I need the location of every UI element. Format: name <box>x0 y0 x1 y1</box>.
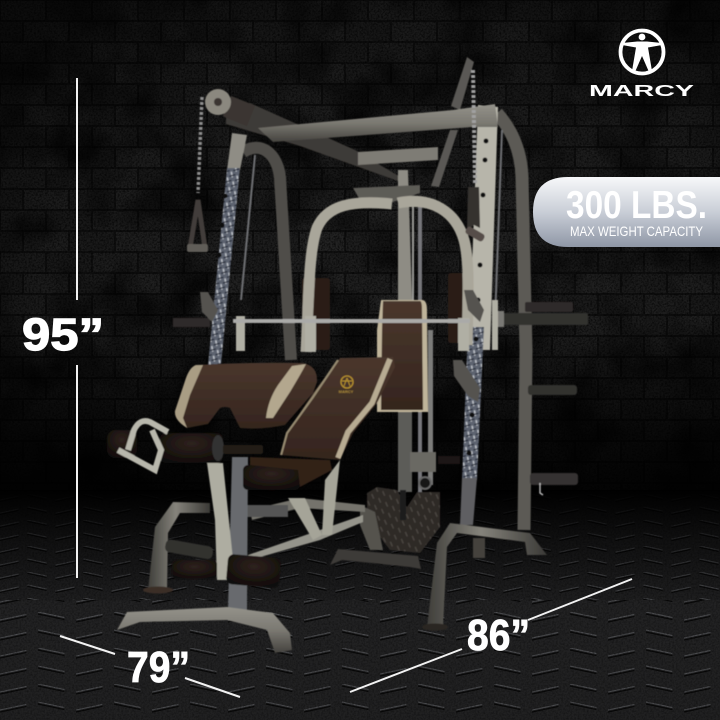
background: brick wall <box>0 0 720 530</box>
right chain and handle <box>464 70 486 242</box>
middle box bar <box>358 147 438 165</box>
left arch <box>243 148 291 360</box>
right floor leg <box>427 523 547 627</box>
foot plate <box>367 487 440 553</box>
bench rear arch <box>148 502 210 590</box>
weight capacity badge <box>533 177 720 247</box>
left upright <box>208 133 247 365</box>
top cross beam <box>258 104 498 142</box>
rear foot bar <box>330 549 421 569</box>
width dimension <box>350 579 632 692</box>
smith machine home gym <box>107 57 588 653</box>
background: herringbone floor <box>0 490 720 720</box>
center column <box>398 170 433 505</box>
hook guards <box>200 290 484 402</box>
barbell <box>173 302 588 327</box>
depth dimension <box>60 636 240 697</box>
pulley housing <box>353 185 420 202</box>
bench white post <box>207 463 233 580</box>
bench front base <box>117 607 292 653</box>
rear diagonal beam <box>226 103 402 181</box>
left chain and handle <box>187 97 208 252</box>
seat cushion <box>250 457 332 487</box>
preacher curl pad <box>175 363 317 429</box>
depth dimension: 79” <box>127 643 190 692</box>
seat logo: MARCY <box>339 389 354 394</box>
barbell carriages <box>236 300 498 352</box>
preacher curl white frame <box>118 421 168 470</box>
Marcy logo <box>589 30 695 100</box>
right diagonal brace <box>431 57 474 187</box>
left pulley <box>205 89 255 126</box>
guide rods <box>241 130 502 320</box>
upright back pad <box>377 300 428 412</box>
Marcy logo: MARCY <box>589 83 695 100</box>
right arch and rear leg <box>497 113 526 530</box>
leg lift cables and selector <box>410 452 460 489</box>
bench rails <box>233 460 365 560</box>
width dimension: 86” <box>467 611 530 660</box>
right upright <box>460 105 498 525</box>
pec deck arches <box>306 201 468 352</box>
weight peg and rollers <box>107 430 300 588</box>
bench grey post <box>228 457 248 610</box>
height dimension: 95” <box>22 309 104 360</box>
weight plate pegs <box>528 385 578 495</box>
bench rear leg <box>360 505 383 550</box>
logo emblem <box>620 30 664 74</box>
brown back pads behind pec deck <box>302 273 468 350</box>
incline seat back pad <box>280 357 395 460</box>
